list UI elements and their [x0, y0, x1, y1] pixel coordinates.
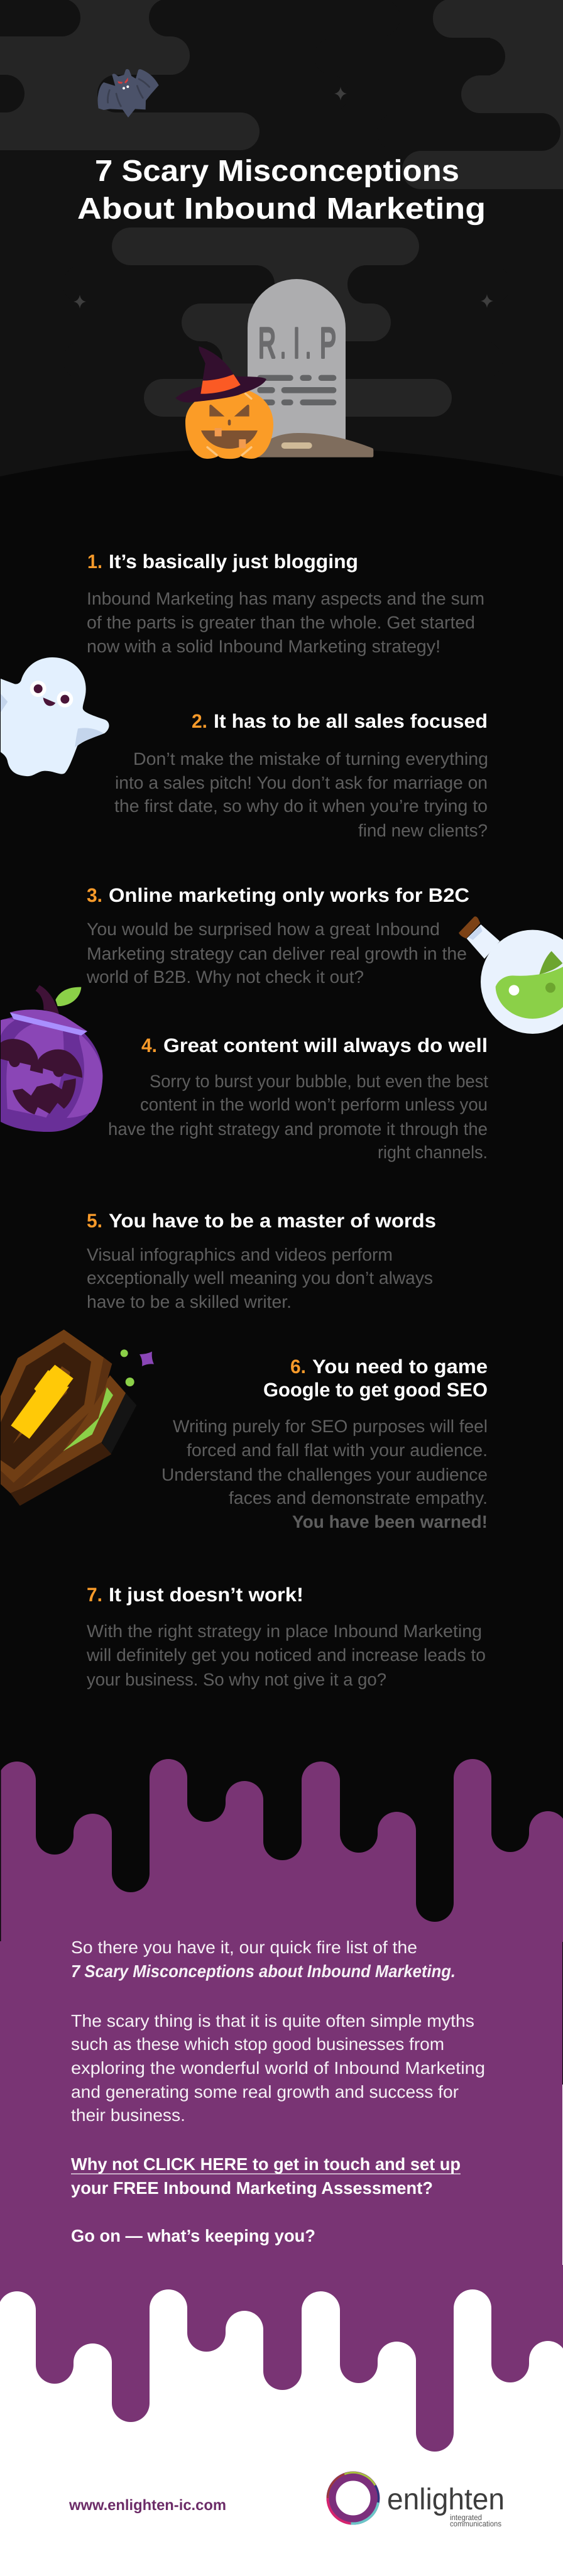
conclusion intro text	[71, 1937, 456, 1981]
conclusion paragraph: exploring the wonderful world of Inbound Marketing	[71, 2058, 485, 2078]
item 7	[86, 1584, 486, 1689]
logo tagline: integrated	[450, 2513, 482, 2522]
title	[77, 155, 486, 226]
item 6 body: You have been warned!	[292, 1512, 488, 1532]
logo ring	[319, 2464, 388, 2533]
panel: dark spooky hero	[0, 0, 563, 522]
item 6 heading	[263, 1356, 488, 1401]
item 2 body: find new clients?	[358, 821, 488, 840]
item 7 body: your business. So why not give it a go?	[87, 1670, 386, 1689]
item 7 body: With the right strategy in place Inbound Marketing	[87, 1621, 482, 1641]
item 4 body	[108, 1072, 488, 1162]
item 7 body: will definitely get you noticed and increase leads to	[86, 1645, 486, 1665]
call to action: Why not CLICK HERE to get in touch and set up	[71, 2154, 461, 2174]
logo wordmark: enlighten	[387, 2483, 505, 2516]
item 2 body: into a sales pitch! You don’t ask for marriage on	[115, 773, 488, 792]
icon: pumpkin with witch hat	[175, 346, 273, 459]
item 7 body	[86, 1621, 486, 1689]
icon: gravestone: P	[320, 319, 336, 367]
panel: purple dripping conclusion	[0, 1759, 563, 2452]
title: About Inbound Marketing	[77, 192, 486, 226]
conclusion paragraph: and generating some real growth and success for	[71, 2082, 459, 2102]
icon: potion flask	[459, 916, 563, 1034]
item 5 body: have to be a skilled writer.	[87, 1292, 292, 1312]
icon: grave mound	[253, 433, 373, 458]
icon: gravestone: R	[258, 319, 276, 367]
item 6 heading: You need to game	[312, 1356, 488, 1378]
panel: misconceptions list	[0, 522, 563, 1967]
conclusion paragraph: The scary thing is that it is quite often simple myths	[71, 2011, 474, 2031]
call to action: your FREE Inbound Marketing Assessment?	[71, 2178, 433, 2198]
item 6 body: Writing purely for SEO purposes will feel	[173, 1417, 488, 1436]
item 1 body: of the parts is greater than the whole. Get started	[87, 613, 475, 632]
item 6 body	[161, 1417, 488, 1532]
item 1 heading: It’s basically just blogging	[109, 551, 358, 573]
conclusion paragraph: their business.	[71, 2105, 185, 2125]
item 4 body: right channels.	[378, 1143, 488, 1162]
item 6 body: Understand the challenges your audience	[161, 1465, 488, 1484]
conclusion paragraph	[71, 2011, 485, 2125]
logo tagline	[450, 2513, 501, 2528]
icon: purple pumpkin	[1, 985, 102, 1132]
item 4 body: content in the world won’t perform unless you	[140, 1095, 488, 1114]
icon: gravestone	[248, 279, 346, 443]
item 4 body: Sorry to burst your bubble, but even the best	[150, 1072, 488, 1091]
logo tagline: communications	[450, 2519, 501, 2528]
item 5 body	[87, 1245, 433, 1312]
item 3 heading: Online marketing only works for B2C	[109, 884, 469, 906]
item 5	[87, 1210, 436, 1312]
item 6	[161, 1356, 488, 1532]
item 6 body: faces and demonstrate empathy.	[229, 1488, 488, 1508]
icon: ghost	[1, 657, 109, 776]
item 4	[108, 1034, 488, 1162]
item 6 body: forced and fall flat with your audience.	[187, 1440, 488, 1460]
item 1 body: now with a solid Inbound Marketing strategy!	[87, 637, 440, 656]
item 1 body: Inbound Marketing has many aspects and the sum	[87, 589, 484, 608]
item 6 heading: Google to get good SEO	[263, 1379, 488, 1401]
item 5 heading: You have to be a master of words	[109, 1210, 436, 1232]
item 6 heading: 6.	[290, 1356, 306, 1378]
item 3	[86, 884, 469, 987]
item 2 body: Don’t make the mistake of turning everything	[133, 749, 488, 769]
item 5 body: Visual infographics and videos perform	[87, 1245, 393, 1264]
icon: gravestone: .	[280, 319, 286, 367]
panel: white footer background	[0, 1967, 563, 2576]
ground	[0, 447, 563, 522]
item 7 heading: 7.	[87, 1584, 102, 1606]
conclusion intro text: 7 Scary Misconceptions about Inbound Marketing.	[71, 1961, 456, 1981]
icon: coffin with cross	[1, 1330, 154, 1506]
conclusion intro text: So there you have it, our quick fire list of the	[71, 1937, 417, 1957]
item 2 heading: It has to be all sales focused	[214, 710, 488, 732]
item 2 heading: 2.	[192, 710, 207, 732]
item 3 body: You would be surprised how a great Inbound	[87, 919, 440, 939]
item 5 heading: 5.	[87, 1210, 102, 1232]
item 3 body	[86, 919, 467, 987]
closing line: Go on — what’s keeping you?	[71, 2226, 315, 2245]
item 7 heading: It just doesn’t work!	[109, 1584, 303, 1606]
icon: gravestone: .	[305, 319, 311, 367]
item 3 body: world of B2B. Why not check it out?	[86, 967, 364, 987]
item 1	[87, 551, 484, 656]
panel: black backing above drips	[0, 1728, 563, 2042]
item 3 heading: 3.	[87, 884, 102, 906]
item 4 heading: Great content will always do well	[163, 1034, 488, 1056]
icon: bat	[97, 69, 159, 118]
item 3 body: Marketing strategy can deliver real growth in the	[87, 944, 467, 963]
website url: www.enlighten-ic.com	[68, 2497, 226, 2514]
item 2 body	[114, 749, 488, 840]
item 5 body: exceptionally well meaning you don’t always	[87, 1268, 433, 1288]
call to action	[71, 2154, 461, 2198]
item 2 body: the first date, so why do it when you’re trying to	[114, 796, 488, 816]
conclusion paragraph: such as these which stop good businesses from	[71, 2034, 444, 2054]
item 1 heading: 1.	[87, 551, 102, 573]
item 4 body: have the right strategy and promote it through the	[108, 1119, 488, 1139]
title: 7 Scary Misconceptions	[95, 155, 459, 188]
item 2	[114, 710, 488, 840]
item 1 body	[87, 589, 484, 656]
logo: enlighten	[319, 2464, 505, 2533]
item 4 heading: 4.	[141, 1034, 157, 1056]
icon: gravestone: I	[293, 319, 300, 367]
